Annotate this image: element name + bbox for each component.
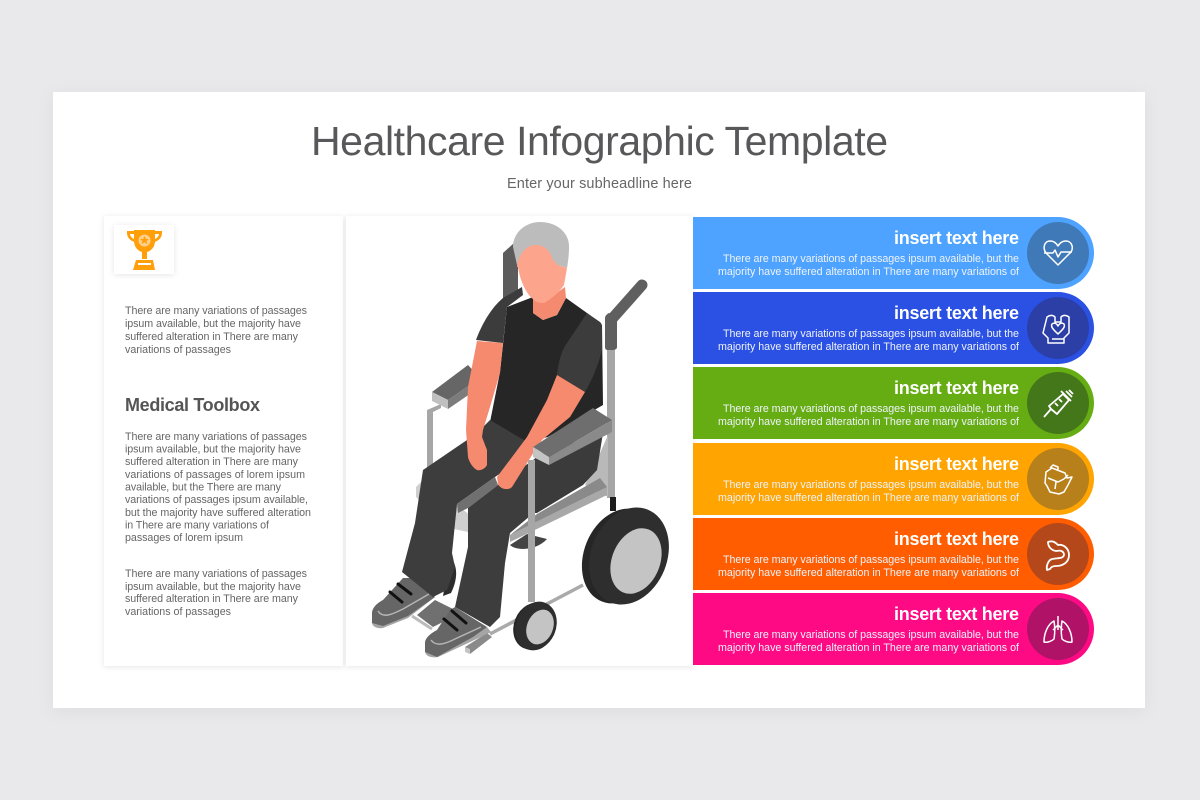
- panel: bar 5 orange: [693, 518, 1094, 590]
- panel: bar 2 dark blue: [693, 292, 1094, 364]
- bar 2 text: There are many variations of passages ipsum available, but the: [723, 328, 1019, 340]
- bar 6 text: There are many variations of passages ipsum available, but the: [723, 629, 1019, 641]
- bar 5 heading: insert text here: [894, 529, 1019, 549]
- left armrest: [432, 365, 480, 409]
- text block: body: passages of lorem ipsum: [125, 532, 243, 544]
- big wheel: [568, 495, 683, 617]
- slide card: [53, 92, 1145, 708]
- panel: bar 4 amber: [693, 443, 1094, 515]
- bar 4 text: majority have suffered alteration in There are many variations of: [718, 492, 1019, 504]
- right leg: [455, 455, 540, 627]
- panel: bar 6 pink: [693, 593, 1094, 665]
- subtitle: Enter your subheadline here: [507, 176, 692, 192]
- bar 6 text: [718, 629, 1019, 654]
- chair handle: [605, 285, 642, 350]
- text block: body: suffered alteration in There are many: [125, 456, 299, 468]
- text block: body: available, but the There are many: [125, 482, 282, 494]
- bar 5 text: [718, 554, 1019, 579]
- seat frame: [585, 435, 608, 497]
- right shoe: [425, 607, 491, 657]
- chair back post: [503, 243, 518, 301]
- bar 5 text: There are many variations of passages ipsum available, but the: [723, 554, 1019, 566]
- left leg: [402, 420, 535, 597]
- heading: medical toolbox: Medical Toolbox: [125, 395, 260, 415]
- neck: [533, 287, 566, 320]
- bar 1 text: majority have suffered alteration in There are many variations of: [718, 266, 1019, 278]
- icon: lungs: [1044, 616, 1072, 642]
- text block: intro: ipsum available, but the majority have: [125, 318, 301, 330]
- icon: hands holding heart: [1043, 316, 1069, 343]
- bar 1 text: There are many variations of passages ipsum available, but the: [723, 253, 1019, 265]
- text block: body: There are many variations of passages: [125, 431, 307, 443]
- bar 4 text: [718, 479, 1019, 504]
- bar 3 text: majority have suffered alteration in There are many variations of: [718, 416, 1019, 428]
- text block: body: [125, 431, 311, 544]
- bar 1 heading: insert text here: [894, 228, 1019, 248]
- bar 4 heading: insert text here: [894, 454, 1019, 474]
- bar 2 text: [718, 328, 1019, 353]
- text block: body: in There are many variations of: [125, 520, 269, 532]
- panel: illustration background: [346, 216, 693, 666]
- text block: body: but the majority have suffered alteration: [125, 507, 311, 519]
- hair: [513, 222, 569, 270]
- bar 2 text: majority have suffered alteration in There are many variations of: [718, 341, 1019, 353]
- bar 3 text: There are many variations of passages ipsum available, but the: [723, 403, 1019, 415]
- icon: medicine pack: [1045, 465, 1072, 494]
- text block: closing: ipsum available, but the majority have: [125, 581, 301, 593]
- text block: closing: suffered alteration in There are many: [125, 593, 299, 605]
- seat strip between legs: [457, 477, 498, 513]
- panel: bar 3 green: [693, 367, 1094, 439]
- text block: closing: [125, 568, 307, 618]
- small wheel: [506, 595, 564, 657]
- text block: closing: variations of passages: [125, 606, 231, 618]
- right arm: [497, 375, 585, 489]
- left sleeve: [476, 287, 523, 343]
- text block: intro: variations of passages: [125, 344, 231, 356]
- left arm: [466, 341, 503, 470]
- text block: intro: [125, 305, 307, 356]
- bar 3 text: [718, 403, 1019, 428]
- text block: intro: suffered alteration in There are many: [125, 331, 299, 343]
- text block: body: variations of passages of lorem ipsum: [125, 469, 305, 481]
- illustration: person in wheelchair: [372, 222, 683, 657]
- icon: syringe: [1044, 390, 1073, 417]
- bar 1 text: [718, 253, 1019, 278]
- icon: heart with pulse: [1044, 241, 1072, 265]
- bar 2 heading: insert text here: [894, 303, 1019, 323]
- bar 3 heading: insert text here: [894, 378, 1019, 398]
- bar 5 text: majority have suffered alteration in There are many variations of: [718, 567, 1019, 579]
- face: [517, 245, 567, 303]
- icon: stomach: [1047, 541, 1069, 570]
- right armrest: [533, 408, 612, 465]
- left shoe: [372, 578, 435, 628]
- icon: trophy: [114, 225, 174, 274]
- bar 6 text: majority have suffered alteration in There are many variations of: [718, 642, 1019, 654]
- text block: body: ipsum available, but the majority have: [125, 444, 301, 456]
- footrest: [412, 600, 492, 654]
- front post: [528, 460, 535, 602]
- bottom bar: [490, 585, 583, 634]
- torso: [490, 297, 603, 442]
- text block: body: variations of passages ipsum available,: [125, 494, 308, 506]
- panel: medical toolbox: [104, 216, 343, 666]
- left back calf: [443, 557, 456, 596]
- title: Healthcare Infographic Template: [311, 118, 888, 164]
- panel: bar 1 blue: [693, 217, 1094, 289]
- text block: intro: There are many variations of passages: [125, 305, 307, 317]
- bar 6 heading: insert text here: [894, 604, 1019, 624]
- text block: closing: There are many variations of passages: [125, 568, 307, 580]
- bar 4 text: There are many variations of passages ipsum available, but the: [723, 479, 1019, 491]
- right sleeve: [557, 313, 602, 392]
